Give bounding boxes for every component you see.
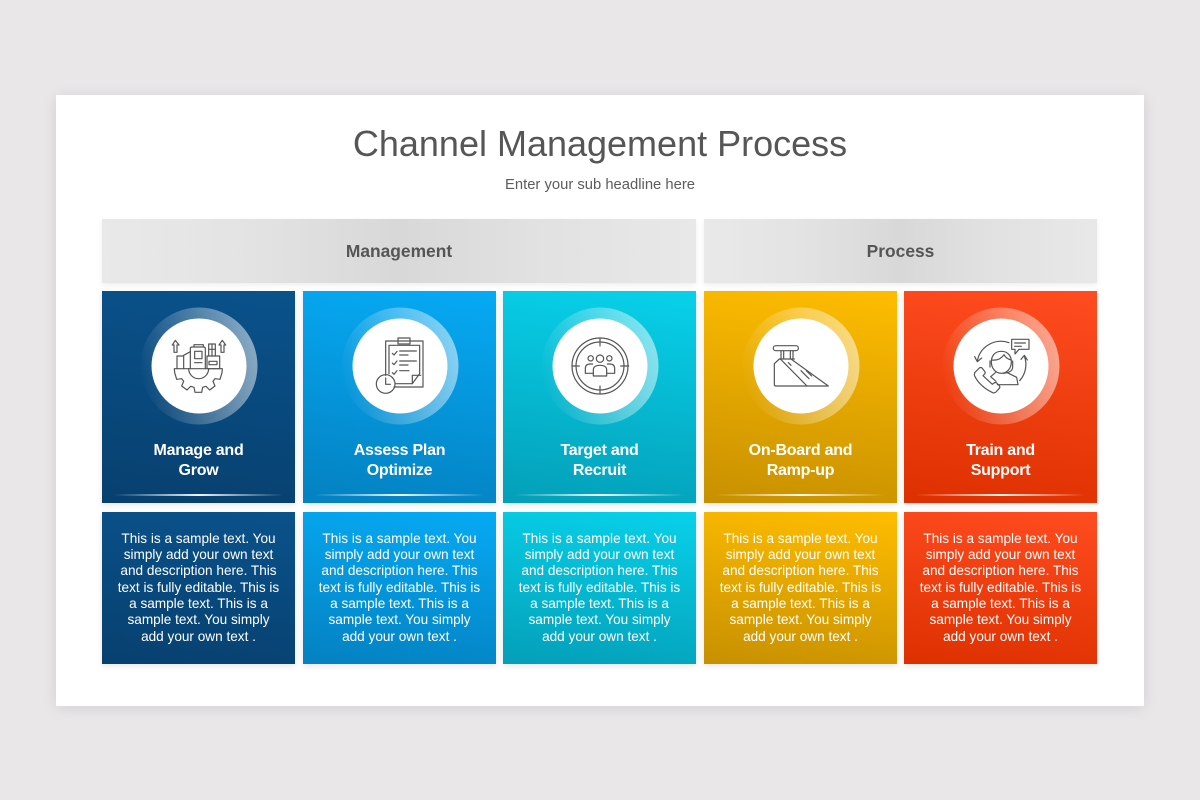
text block 2: This is a sample text. You bbox=[322, 530, 477, 546]
text block 5: text is fully editable. This is bbox=[920, 580, 1081, 595]
icon: target with people bbox=[544, 308, 658, 424]
text block 2 bbox=[303, 512, 496, 664]
text block 5 bbox=[904, 512, 1097, 664]
label: Optimize bbox=[367, 462, 432, 479]
text block 3: add your own text . bbox=[542, 629, 657, 644]
text block 1: text is fully editable. This is bbox=[118, 580, 279, 595]
text block 4: sample text. You simply bbox=[729, 612, 872, 627]
subtitle: Enter your sub headline here bbox=[505, 177, 695, 193]
icon: ramp bbox=[745, 308, 860, 424]
text block 2: add your own text . bbox=[342, 629, 457, 644]
glow line bbox=[916, 494, 1085, 496]
text block 1: add your own text . bbox=[141, 629, 256, 644]
label: Assess Plan bbox=[354, 442, 445, 459]
glow line bbox=[716, 494, 885, 496]
card: Manage and Grow bbox=[102, 291, 295, 503]
glow line bbox=[515, 494, 684, 496]
text block 2: and description here. This bbox=[321, 563, 478, 578]
label: Manage and bbox=[154, 442, 243, 459]
text block 3: a sample text. This is a bbox=[530, 596, 669, 611]
text block 5: simply add your own text bbox=[926, 547, 1075, 562]
text block 5: sample text. You simply bbox=[929, 612, 1072, 627]
text block 1: and description here. This bbox=[120, 563, 277, 578]
text block 2: sample text. You simply bbox=[328, 612, 471, 627]
text block 2: text is fully editable. This is bbox=[319, 580, 480, 595]
card: Target and Recruit bbox=[503, 291, 696, 503]
header: Management bbox=[102, 219, 696, 283]
header: Management: Management bbox=[346, 241, 452, 261]
card: Train and Support bbox=[904, 291, 1097, 503]
label: Grow bbox=[179, 462, 218, 479]
text block 3: simply add your own text bbox=[525, 547, 674, 562]
text block 3: and description here. This bbox=[521, 563, 678, 578]
label: On-Board and bbox=[749, 442, 852, 459]
label bbox=[354, 442, 445, 479]
text block 5: add your own text . bbox=[943, 629, 1058, 644]
label: Support bbox=[971, 462, 1030, 479]
text block 3 bbox=[503, 512, 696, 664]
label: Train and bbox=[966, 442, 1035, 459]
text block 4: text is fully editable. This is bbox=[720, 580, 881, 595]
card: Assess Plan Optimize bbox=[303, 291, 496, 503]
text block 3: This is a sample text. You bbox=[522, 530, 677, 546]
label: Target and bbox=[560, 442, 639, 459]
text block 4: add your own text . bbox=[743, 629, 858, 644]
icon: clipboard and clock bbox=[344, 308, 458, 424]
text block 2: simply add your own text bbox=[325, 547, 474, 562]
text block 3: text is fully editable. This is bbox=[519, 580, 680, 595]
text block 1: sample text. You simply bbox=[127, 612, 270, 627]
label bbox=[560, 442, 639, 479]
glow line bbox=[114, 494, 283, 496]
text block 5: This is a sample text. You bbox=[923, 530, 1078, 546]
label bbox=[154, 442, 243, 479]
label bbox=[966, 442, 1035, 479]
text block 1: simply add your own text bbox=[124, 547, 273, 562]
text block 1: This is a sample text. You bbox=[121, 530, 276, 546]
label bbox=[749, 442, 852, 479]
text block 5: a sample text. This is a bbox=[931, 596, 1070, 611]
text block 1: a sample text. This is a bbox=[129, 596, 268, 611]
text block 4: and description here. This bbox=[722, 563, 879, 578]
label: Recruit bbox=[573, 462, 626, 479]
text block 2: a sample text. This is a bbox=[330, 596, 469, 611]
icon: support agent bbox=[946, 308, 1060, 424]
text block 4 bbox=[704, 512, 897, 664]
header: Process: Process bbox=[867, 241, 934, 261]
text block 1 bbox=[102, 512, 295, 664]
text block 4: This is a sample text. You bbox=[723, 530, 878, 546]
text block 5: and description here. This bbox=[922, 563, 1079, 578]
glow line bbox=[315, 494, 484, 496]
header: Process bbox=[704, 219, 1097, 283]
icon: gear with factory and up arrows bbox=[143, 308, 258, 424]
label: Ramp-up bbox=[767, 462, 834, 479]
text block 4: a sample text. This is a bbox=[731, 596, 870, 611]
text block 3: sample text. You simply bbox=[528, 612, 671, 627]
title: Channel Management Process bbox=[353, 123, 847, 164]
text block 4: simply add your own text bbox=[726, 547, 875, 562]
card: On-Board and Ramp-up bbox=[704, 291, 897, 503]
panel: white slide bbox=[56, 95, 1144, 706]
